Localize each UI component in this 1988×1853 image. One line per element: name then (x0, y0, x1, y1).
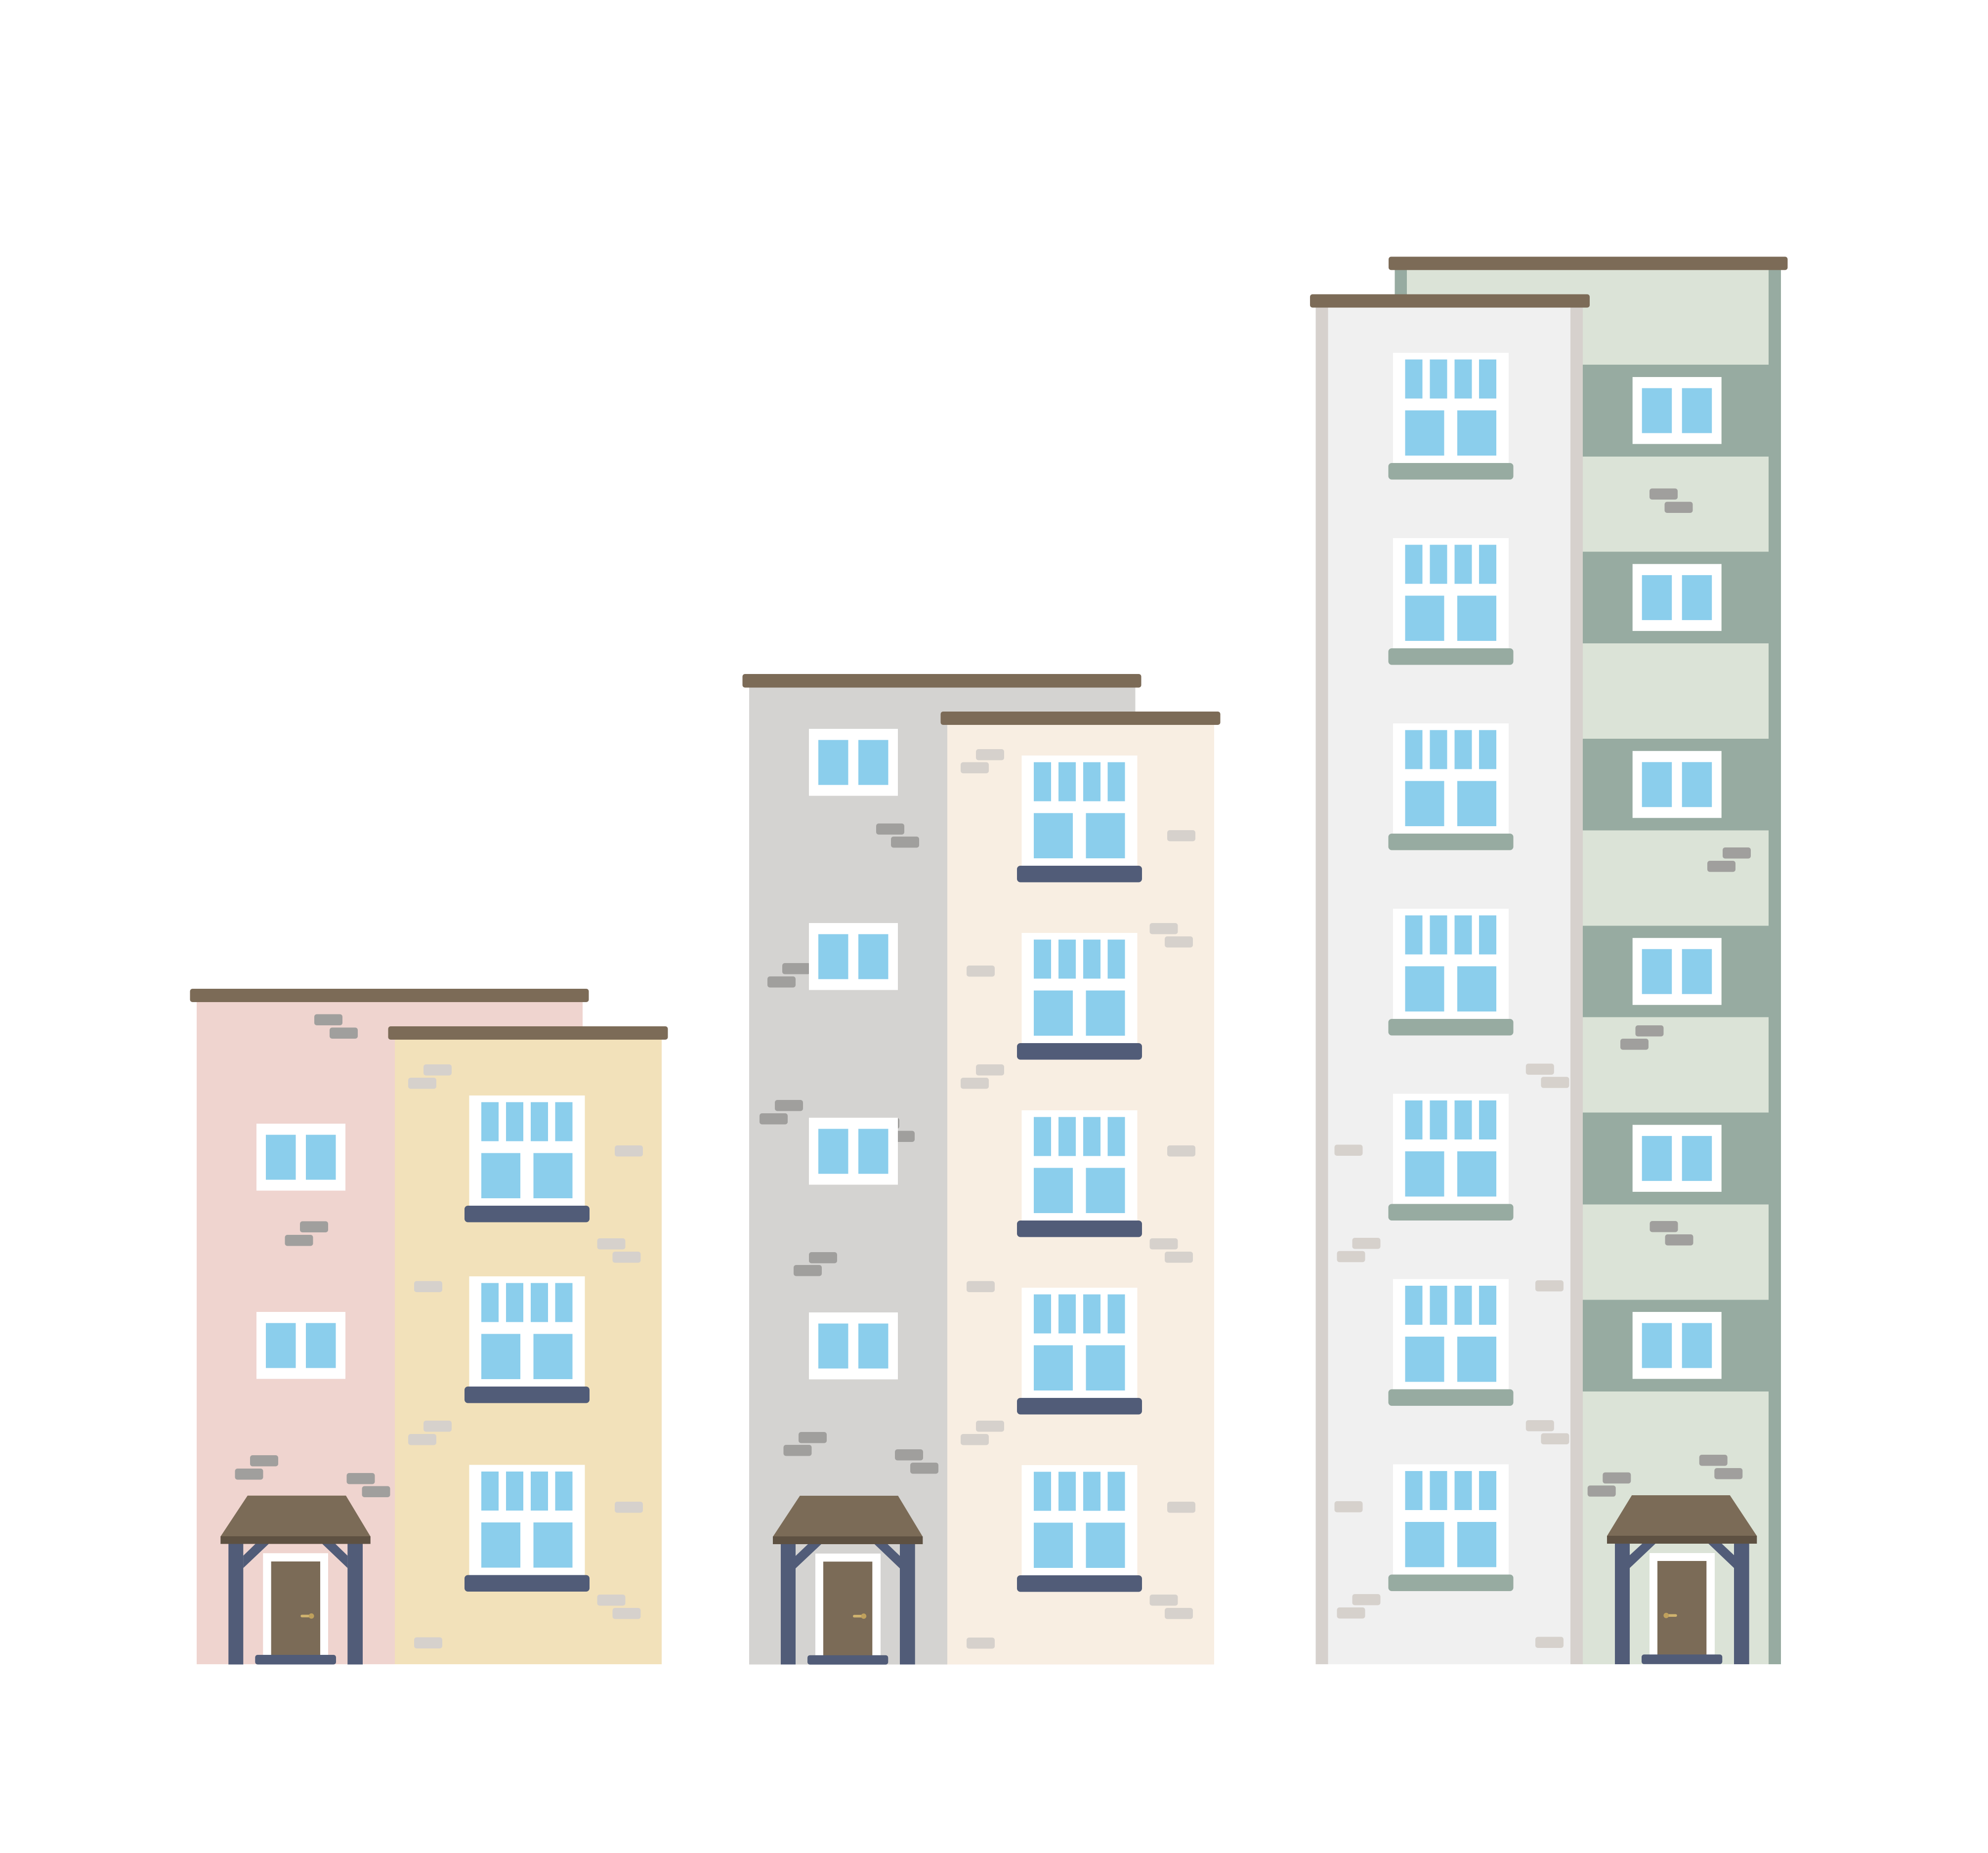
window: green 5 (1633, 1125, 1722, 1192)
window with sill: cream 1 (1017, 756, 1142, 883)
window with sill: white 5 (1389, 1094, 1513, 1221)
window: green 4 (1633, 938, 1722, 1005)
window with sill: cream 2 (1017, 933, 1142, 1059)
bricks on yellow wall (408, 1064, 643, 1648)
window: green 1 (1633, 377, 1722, 444)
building 3: high-rise green and white (1310, 257, 1788, 1664)
roof: cream block (941, 712, 1221, 725)
roof: grey block (742, 674, 1142, 688)
window with sill: yellow bottom (465, 1465, 590, 1592)
window: pink upper (256, 1124, 345, 1191)
window: green 6 (1633, 1312, 1722, 1379)
back wall: green with dark edges (1395, 267, 1781, 1664)
bricks on green wall (1588, 488, 1751, 1497)
bricks on cream wall (961, 749, 1195, 1648)
back wall: pale green panels (1407, 267, 1769, 1664)
front wall: yellow (395, 1038, 662, 1664)
window: grey 3 (809, 1118, 898, 1185)
bricks on grey wall (760, 823, 938, 1474)
back wall: grey (749, 686, 1136, 1664)
window: grey 4 (809, 1312, 898, 1380)
roof: white block (1310, 295, 1590, 307)
window with sill: white 6 (1389, 1279, 1513, 1406)
bricks on pink wall (235, 1014, 390, 1497)
window: grey 2 (809, 923, 898, 990)
front wall: white centre (1328, 305, 1570, 1664)
building 1: low-rise pink and yellow (190, 989, 668, 1664)
window: green 2 (1633, 564, 1722, 631)
window with sill: white 7 (1389, 1465, 1513, 1591)
roof: pink block (190, 989, 589, 1002)
window with sill: cream 5 (1017, 1465, 1142, 1592)
porch and door: building 3 (1607, 1495, 1757, 1664)
porch and door: building 1 (220, 1496, 371, 1664)
window with sill: white 3 (1389, 723, 1513, 850)
front wall: white with grey edges (1315, 305, 1583, 1664)
roof: green block (1389, 257, 1788, 270)
window with sill: white 1 (1389, 353, 1513, 479)
window: green 3 (1633, 751, 1722, 818)
bricks on white wall (1334, 1063, 1569, 1648)
porch and door: building 2 (773, 1496, 923, 1665)
window with sill: cream 3 (1017, 1110, 1142, 1237)
back wall: pink (197, 1001, 583, 1664)
window with sill: white 4 (1389, 909, 1513, 1036)
window with sill: white 2 (1389, 538, 1513, 665)
window: pink lower (256, 1312, 345, 1379)
window with sill: yellow middle (465, 1276, 590, 1403)
front wall: cream (947, 723, 1214, 1664)
roof: yellow block (388, 1026, 668, 1040)
window with sill: yellow top (465, 1095, 590, 1222)
building 2: mid-rise grey and cream (742, 674, 1221, 1665)
window: grey 1 (809, 729, 898, 796)
window with sill: cream 4 (1017, 1288, 1142, 1414)
